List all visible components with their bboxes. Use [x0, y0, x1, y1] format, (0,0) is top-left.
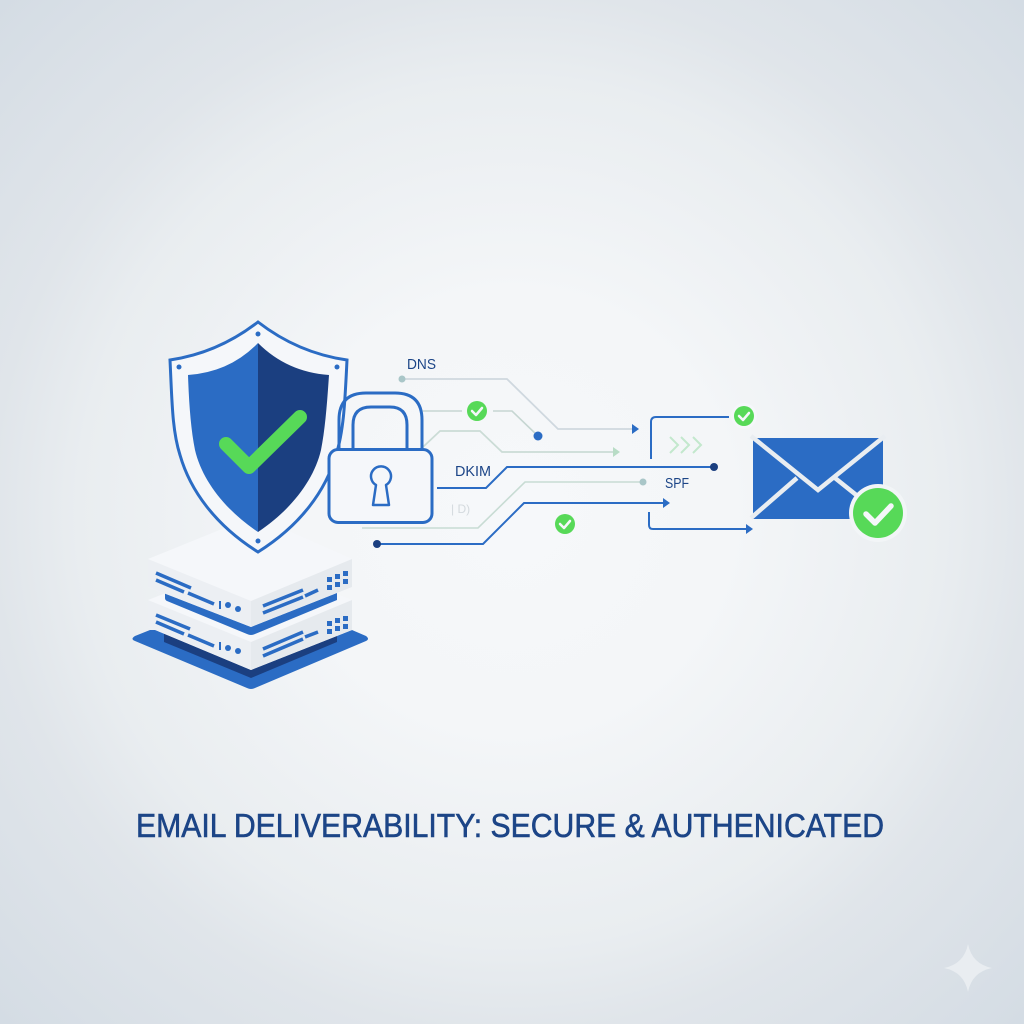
- label: SPF: SPF: [665, 476, 689, 492]
- label: DKIM: DKIM: [455, 463, 491, 480]
- SPF line: [362, 478, 646, 528]
- check badge: lower line: [555, 514, 575, 534]
- title: EMAIL DELIVERABILITY: SECURE & AUTHENICATED: [136, 807, 884, 844]
- blue band between servers: [165, 593, 337, 635]
- envelope body: [753, 438, 883, 519]
- shield left half: [188, 343, 258, 532]
- upper server unit: [148, 527, 352, 627]
- pale green arrow line: [423, 431, 620, 457]
- icon: shield check mark: [226, 417, 300, 467]
- server base plate: [132, 630, 368, 689]
- padlock: [329, 393, 432, 522]
- icon: sparkle: [944, 944, 992, 992]
- envelope icon: [751, 436, 907, 542]
- lock shackle: [339, 393, 422, 450]
- lower bracket arrow: [649, 512, 753, 534]
- lower server unit: [148, 560, 352, 670]
- check badge: upper right: [731, 403, 757, 429]
- faint glyphs: | D): [451, 502, 470, 516]
- check badge: top line: [467, 401, 487, 421]
- envelope folds: [751, 436, 885, 518]
- connection lines: [362, 376, 753, 548]
- server stack: [132, 527, 368, 689]
- envelope check badge: [849, 484, 907, 542]
- DKIM line: [437, 463, 718, 488]
- icon: keyhole: [371, 466, 391, 505]
- shield: [170, 322, 347, 552]
- base shadow: [164, 630, 337, 678]
- shield right half: [258, 343, 329, 532]
- lock body: [329, 450, 432, 522]
- label: DNS: DNS: [407, 356, 436, 373]
- upper bracket line: [651, 417, 729, 459]
- DNS line: [398, 376, 639, 434]
- line to blue node: [423, 411, 542, 440]
- shield outer: [170, 322, 347, 552]
- lower blue line: [373, 498, 670, 548]
- shield rivets: [176, 332, 340, 544]
- icon: chevrons: [670, 437, 701, 453]
